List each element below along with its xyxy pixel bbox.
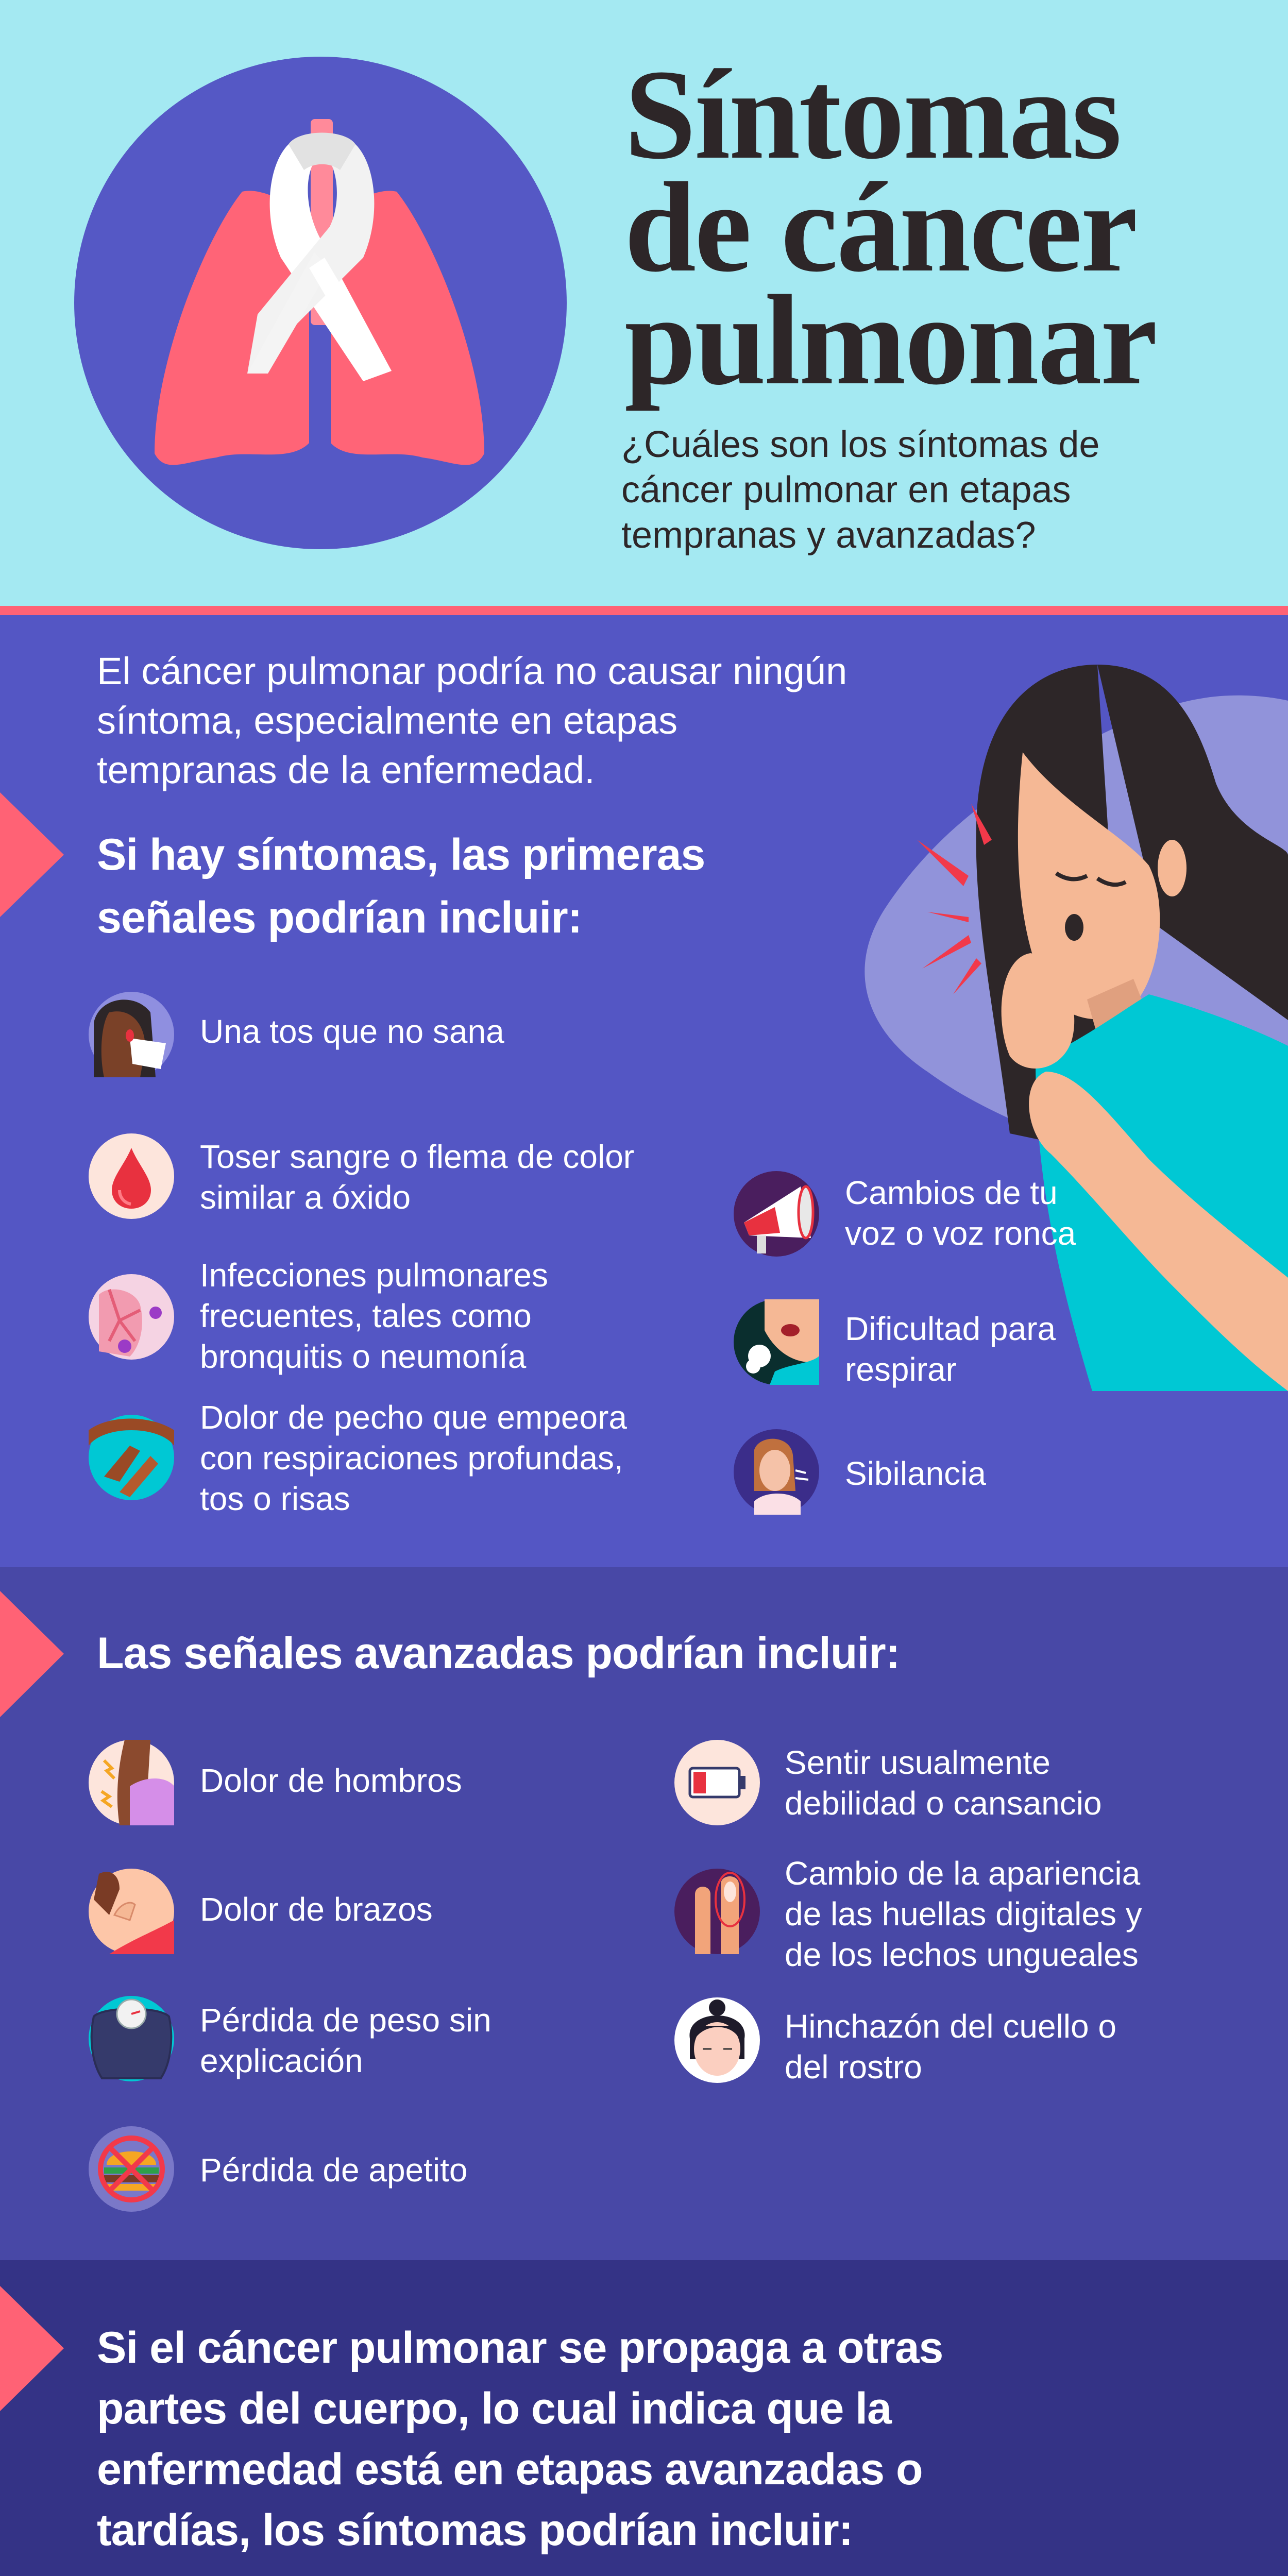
intro text: tempranas de la enfermedad. [97, 749, 595, 791]
subtitle: cáncer pulmonar en etapas [621, 469, 1071, 511]
item: chest pain [89, 1399, 627, 1517]
item: lung infections [89, 1257, 548, 1375]
title [624, 43, 1156, 412]
item: lung infections: bronquitis o neumonía [200, 1338, 526, 1375]
title: de cáncer [624, 156, 1136, 299]
section 2 background [0, 1567, 1288, 2260]
item: weight loss: explicación [200, 2042, 363, 2079]
item: arm pain [89, 1869, 433, 1954]
item: appetite loss [89, 2126, 468, 2212]
item: voice changes: Cambios de tu [845, 1174, 1058, 1211]
title: Síntomas [624, 43, 1120, 186]
item: weakness: Sentir usualmente [785, 1744, 1050, 1781]
intro text: síntoma, especialmente en etapas [97, 699, 677, 742]
heading: late stage symptoms: Si el cáncer pulmonar se propaga a otras [97, 2323, 943, 2372]
item: wheezing: Sibilancia [845, 1455, 986, 1492]
section 1 background [0, 615, 1288, 1567]
item: cough [89, 992, 504, 1077]
item: breathing difficulty [734, 1299, 1056, 1388]
heading: late stage symptoms: tardías, los síntomas podrían incluir: [97, 2505, 853, 2555]
heading: early signs: señales podrían incluir: [97, 893, 582, 942]
item: swelling face: del rostro [785, 2048, 922, 2086]
arrow: pink triangle section 1 [0, 792, 64, 917]
intro text: El cáncer pulmonar podría no causar ningún [97, 650, 847, 692]
item: lung infections: frecuentes, tales como [200, 1297, 532, 1334]
subtitle: tempranas y avanzadas? [621, 515, 1036, 556]
heading: late stage symptoms: partes del cuerpo, lo cual indica que la [97, 2384, 891, 2433]
heading: late stage symptoms [97, 2323, 943, 2555]
item: chest pain: con respiraciones profundas, [200, 1439, 623, 1477]
item: fingernail changes [674, 1855, 1142, 1973]
item: chest pain: tos o risas [200, 1480, 350, 1517]
item: breathing difficulty: respirar [845, 1351, 957, 1388]
arrow: pink triangle section 3 [0, 2286, 64, 2411]
item: swelling face [674, 1997, 1116, 2086]
item: fingernail changes: de las huellas digitales y [785, 1895, 1142, 1933]
item: wheezing [734, 1429, 986, 1515]
illustration: coughing woman [865, 665, 1288, 1391]
subtitle: ¿Cuáles son los síntomas de [621, 424, 1099, 465]
heading: early signs [97, 830, 705, 942]
subtitle [621, 424, 1099, 556]
item: weight loss [89, 1996, 492, 2081]
item: weakness: debilidad o cansancio [785, 1785, 1102, 1822]
arrow: pink triangle section 2 [0, 1591, 64, 1717]
item: weight loss: Pérdida de peso sin [200, 2002, 492, 2039]
item: coughing blood: Toser sangre o flema de color [200, 1138, 634, 1175]
item: arm pain: Dolor de brazos [200, 1891, 433, 1928]
item: weakness [674, 1740, 1102, 1825]
item: chest pain: Dolor de pecho que empeora [200, 1399, 627, 1436]
item: coughing blood: similar a óxido [200, 1179, 411, 1216]
item: breathing difficulty: Dificultad para [845, 1310, 1056, 1347]
item: shoulder pain [89, 1740, 462, 1825]
item: coughing blood [89, 1133, 634, 1219]
item: voice changes: voz o voz ronca [845, 1215, 1076, 1252]
pink divider [0, 606, 1288, 615]
heading: early signs: Si hay síntomas, las primeras [97, 830, 705, 879]
item: lung infections: Infecciones pulmonares [200, 1257, 548, 1294]
item: fingernail changes: Cambio de la apariencia [785, 1855, 1140, 1892]
heading: late stage symptoms: enfermedad está en etapas avanzadas o [97, 2445, 923, 2494]
item: shoulder pain: Dolor de hombros [200, 1762, 462, 1799]
title: pulmonar [624, 269, 1156, 412]
item: fingernail changes: de los lechos ungueales [785, 1936, 1139, 1973]
item: cough: Una tos que no sana [200, 1013, 504, 1050]
intro text [97, 650, 847, 791]
icon: lungs with ribbon [74, 57, 567, 549]
item: swelling face: Hinchazón del cuello o [785, 2008, 1116, 2045]
item: voice changes [734, 1171, 1076, 1257]
section 3 background [0, 2260, 1288, 2576]
header background [0, 0, 1288, 607]
item: appetite loss: Pérdida de apetito [200, 2151, 468, 2189]
heading: advanced signs: Las señales avanzadas podrían incluir: [97, 1629, 900, 1678]
